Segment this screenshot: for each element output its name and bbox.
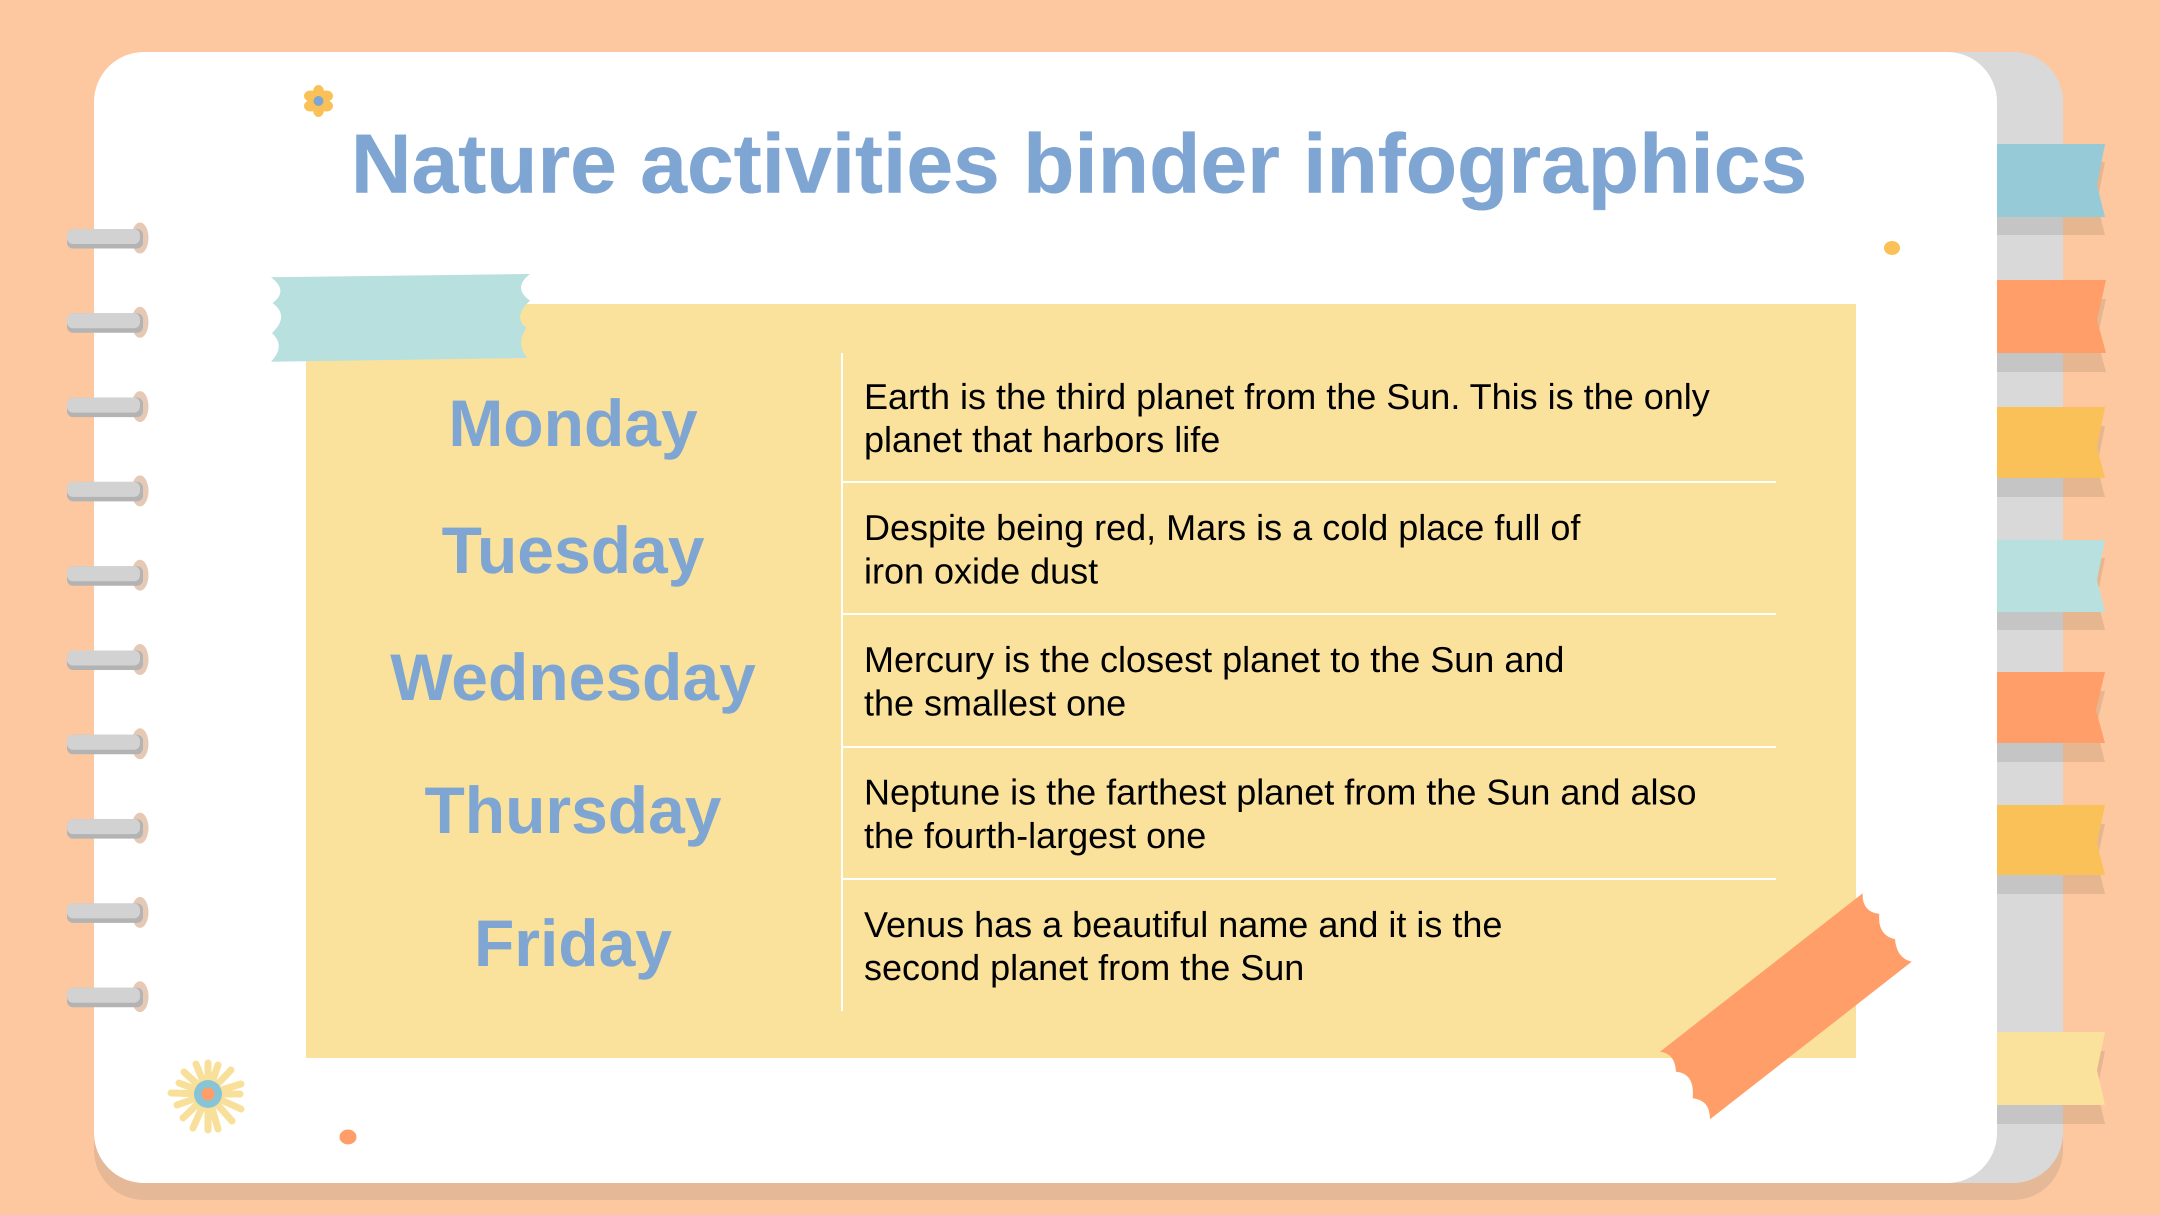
tab: teal: [1997, 540, 2105, 630]
tab: amber: [1997, 407, 2105, 497]
row: Tuesday: iron oxide dust: [864, 550, 1098, 592]
tab: blue: [1997, 144, 2105, 235]
row: Monday: [448, 376, 1710, 460]
row: Monday: Earth is the third planet from the Sun. This is the only: [864, 376, 1710, 417]
row: Thursday: [424, 772, 1697, 856]
vertical divider: [841, 353, 843, 1011]
row: Friday: second planet from the Sun: [864, 947, 1304, 988]
row: Friday: Venus has a beautiful name and it is the: [864, 904, 1502, 945]
row: Thursday: Neptune is the farthest planet from the Sun and also: [864, 772, 1697, 812]
row: Thursday: the fourth-largest one: [864, 815, 1206, 856]
row: Tuesday: Tuesday: [442, 513, 705, 587]
washi tape: orange: [1660, 893, 1912, 1119]
washi tape: teal: [271, 274, 530, 362]
tab: orange lower: [1997, 672, 2105, 762]
tab: amber lower: [1997, 805, 2105, 894]
row: Wednesday: [390, 639, 1564, 724]
row: Wednesday: Mercury is the closest planet to the Sun and: [864, 639, 1564, 680]
row: Monday: Monday: [448, 386, 698, 460]
icon: sun flower: [171, 1063, 241, 1130]
row: Tuesday: Despite being red, Mars is a cold place full of: [864, 507, 1581, 548]
row: Wednesday: the smallest one: [864, 682, 1126, 724]
notebook back page: [1200, 52, 2063, 1183]
binder pegs: [67, 222, 148, 1012]
icon: dot orange: [340, 1130, 356, 1144]
icon: dot amber: [1884, 241, 1900, 255]
row: Friday: Friday: [474, 906, 672, 980]
panel: schedule: [306, 304, 1856, 1058]
row: Friday: [474, 904, 1502, 988]
row: Monday: planet that harbors life: [864, 419, 1220, 460]
row: Thursday: Thursday: [424, 773, 722, 847]
icon: small flower: [304, 85, 333, 117]
tab: orange: [1997, 280, 2106, 372]
row: Tuesday: [442, 507, 1581, 592]
row: Wednesday: Wednesday: [390, 640, 756, 714]
title: Nature activities binder infographics: [351, 116, 1807, 210]
tab: pale yellow: [1997, 1032, 2105, 1124]
row dividers: [842, 481, 1776, 880]
